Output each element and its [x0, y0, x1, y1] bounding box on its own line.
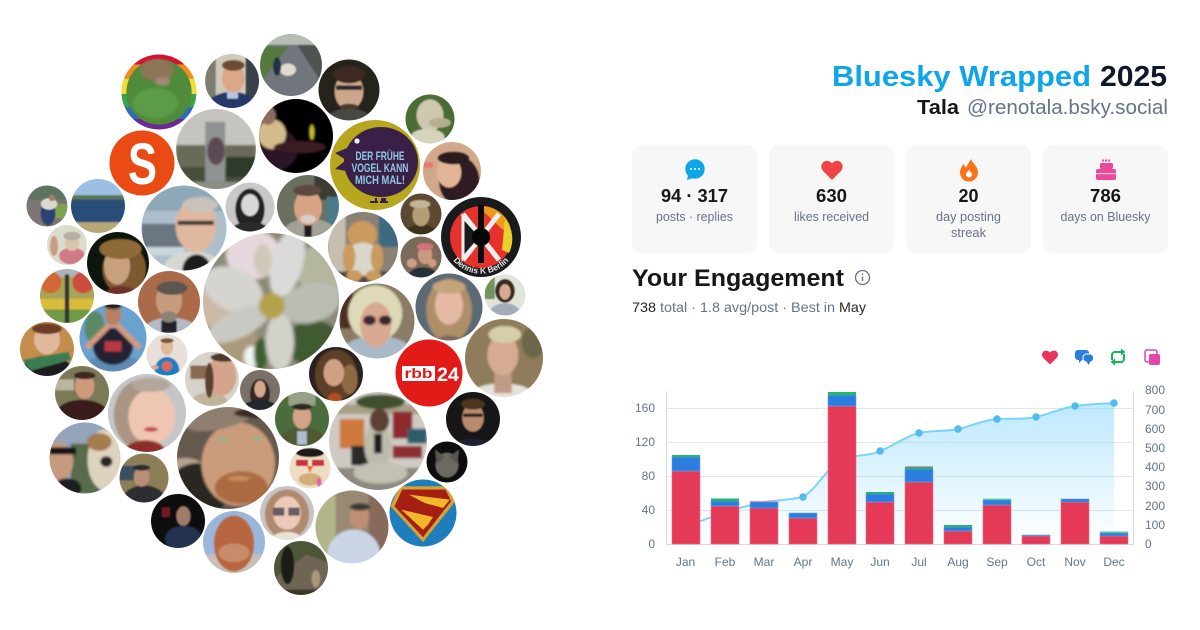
avatar: rainbow turtle: [122, 54, 196, 130]
avatar: woman with long dark hair: [423, 142, 481, 200]
panel: posting streak: day posting: [936, 210, 1001, 224]
avatar: girl in blue dress: [26, 186, 68, 226]
bars: replies: [672, 395, 1128, 536]
avatar: S logo: [110, 130, 174, 197]
avatar: woman in office: [329, 392, 427, 490]
icon: legend repost: [1110, 348, 1126, 366]
avatar: dark blond man: [87, 232, 149, 294]
engagement summary: May: [839, 299, 866, 315]
icon: legend replies: [1075, 350, 1094, 365]
avatar: statue: [406, 94, 454, 144]
engagement summary: 738: [632, 299, 656, 315]
right axis labels: 800: [1145, 383, 1165, 397]
avatar: man in green jacket: [275, 392, 329, 446]
avatar: black and white woman: [226, 182, 274, 232]
month labels: Feb: [715, 555, 736, 569]
avatar: rbb24 logo: 24: [437, 365, 459, 386]
panel: days on Bluesky: [1043, 145, 1168, 253]
right axis labels: 600: [1145, 422, 1165, 436]
panel: posting streak: streak: [951, 226, 987, 240]
avatar: superman shield: [390, 480, 456, 546]
avatar: man with glasses on black: [446, 392, 500, 446]
panel: posts and replies: posts · replies: [656, 210, 733, 224]
left axis labels: 80: [642, 469, 655, 483]
avatar: bald man: [194, 502, 274, 582]
avatar: Dennis K Berlin logo: [441, 197, 521, 277]
avatar: blonde woman portrait: [108, 374, 186, 452]
avatar: man at brick wall: [138, 271, 200, 333]
icon: legend heart: [1042, 351, 1058, 364]
avatar: blonde woman: [416, 274, 482, 340]
user handle: @renotala.bsky.social: [967, 97, 1168, 119]
cumulative area: [685, 403, 1114, 544]
panel: likes received: [769, 145, 894, 253]
avatar: sketched woman: [47, 225, 87, 265]
month labels: Jan: [676, 555, 695, 569]
avatar: man in dark jacket: [120, 454, 168, 502]
user handle: Tala: [917, 97, 960, 119]
legend icons: [1042, 348, 1160, 366]
panel: posts and replies: [632, 145, 757, 253]
grid: [666, 408, 1133, 510]
bars: likes: [672, 406, 1128, 544]
avatar: glasses woman: [252, 478, 322, 548]
month labels: [676, 555, 1125, 569]
month labels: Oct: [1027, 555, 1046, 569]
right axis labels: 300: [1145, 479, 1165, 493]
cumulative line: [685, 399, 1118, 527]
avatar: man with pink cap: [400, 236, 442, 278]
avatar: Berlin wall: [176, 109, 256, 189]
avatar: apple blossom: [203, 233, 339, 369]
badge label: Dennis K Berlin: [454, 257, 508, 274]
avatar: rbb24 logo: rbb: [404, 365, 432, 381]
avatar: man with dark glasses frames: [318, 60, 380, 120]
engagement chart: [635, 383, 1165, 569]
avatar bubble cluster: [20, 34, 543, 595]
panel: likes received: likes received: [794, 210, 869, 224]
bars: reposts: [672, 392, 1128, 533]
right axis labels: 700: [1145, 403, 1165, 417]
avatar: woman side portrait: [185, 352, 239, 406]
bars: quotes: [750, 466, 933, 502]
panel: posting streak: [906, 145, 1031, 253]
left axis labels: [635, 401, 655, 551]
right axis labels: 200: [1145, 499, 1165, 513]
icon: heart: [821, 161, 843, 180]
month labels: Sep: [986, 555, 1008, 569]
avatar: man on stage: [259, 99, 333, 173]
avatar: selfie with dog: [50, 422, 120, 494]
stacked bars: [672, 392, 1128, 544]
avatar: dark man arms crossed: [143, 486, 213, 556]
title: 2025: [1100, 61, 1167, 93]
right axis labels: 100: [1145, 518, 1165, 532]
panel: days on Bluesky: days on Bluesky: [1060, 210, 1151, 224]
icon: flame: [960, 159, 978, 182]
avatar: dark haired woman with desk: [240, 370, 280, 410]
avatar: woman in green jacket: [20, 322, 74, 376]
icon: chat bubble: [685, 159, 705, 180]
icon: cake: [1096, 160, 1116, 180]
avatar: curly haired girl in T-shirt: [484, 274, 526, 316]
panel: likes received: 630: [816, 186, 847, 206]
month labels: Mar: [754, 555, 774, 569]
engagement summary: total · 1.8 avg/post · Best in: [660, 299, 835, 315]
avatar: sheep on road: [260, 34, 322, 96]
avatar: sepia man: [400, 194, 442, 234]
icon: info: [856, 270, 870, 284]
avatar: bird logo: MICH MAL!: [355, 175, 405, 187]
chart axes: [666, 391, 1134, 544]
right axis labels: 500: [1145, 441, 1165, 455]
left axis labels: 160: [635, 401, 655, 415]
avatar: bird logo: VOGEL KANN: [352, 163, 408, 175]
avatar: dark path with dog: [266, 533, 336, 603]
month labels: Aug: [947, 555, 969, 569]
left axis labels: 40: [642, 503, 655, 517]
avatar: man in blue sweater: [205, 54, 259, 108]
avatar: bird logo: [330, 120, 420, 210]
avatar: grey haired smiling man: [277, 175, 339, 237]
avatar: man in cap: [177, 407, 279, 509]
avatar: rbb24 logo: [396, 340, 462, 406]
avatar: cartoon owl: [283, 441, 337, 495]
avatar: blonde with sunglasses: [340, 284, 414, 358]
heading: your engagement: Your Engagement: [632, 265, 844, 292]
icon: legend quotes: [1145, 350, 1160, 365]
avatar: bird logo: DER FRÜHE: [356, 150, 405, 163]
title: Bluesky Wrapped: [832, 61, 1091, 93]
avatar: teddy bear: [328, 212, 398, 282]
avatar: cat: [420, 435, 474, 489]
month labels: Jul: [911, 555, 927, 569]
avatar: lake: [71, 179, 125, 233]
month labels: Nov: [1064, 555, 1086, 569]
right axis labels: [1145, 383, 1165, 551]
month labels: Jun: [870, 555, 890, 569]
month labels: May: [831, 555, 853, 569]
avatar: man with hands clasped: [80, 304, 146, 372]
avatar: S logo: S: [128, 132, 157, 197]
avatar: curly haired woman: [309, 347, 363, 401]
right axis labels: 0: [1145, 537, 1152, 551]
panel: posting streak: 20: [958, 186, 978, 206]
avatar: man in white shirt: [305, 480, 399, 579]
right axis labels: 400: [1145, 460, 1165, 474]
left axis labels: 120: [635, 435, 655, 449]
avatar: grey haired man glasses: [142, 186, 226, 270]
month labels: Apr: [794, 555, 812, 569]
panel: days on Bluesky: 786: [1090, 186, 1121, 206]
left axis labels: 0: [648, 537, 655, 551]
avatar: man in blue tee: [146, 334, 188, 376]
month labels: Dec: [1103, 555, 1125, 569]
panel: posts and replies: 94 · 317: [661, 186, 728, 206]
avatar: man in burgundy shirt: [55, 366, 109, 420]
avatar: short blonde woman: [465, 319, 543, 397]
avatar: rainbow quilt: [40, 269, 94, 323]
